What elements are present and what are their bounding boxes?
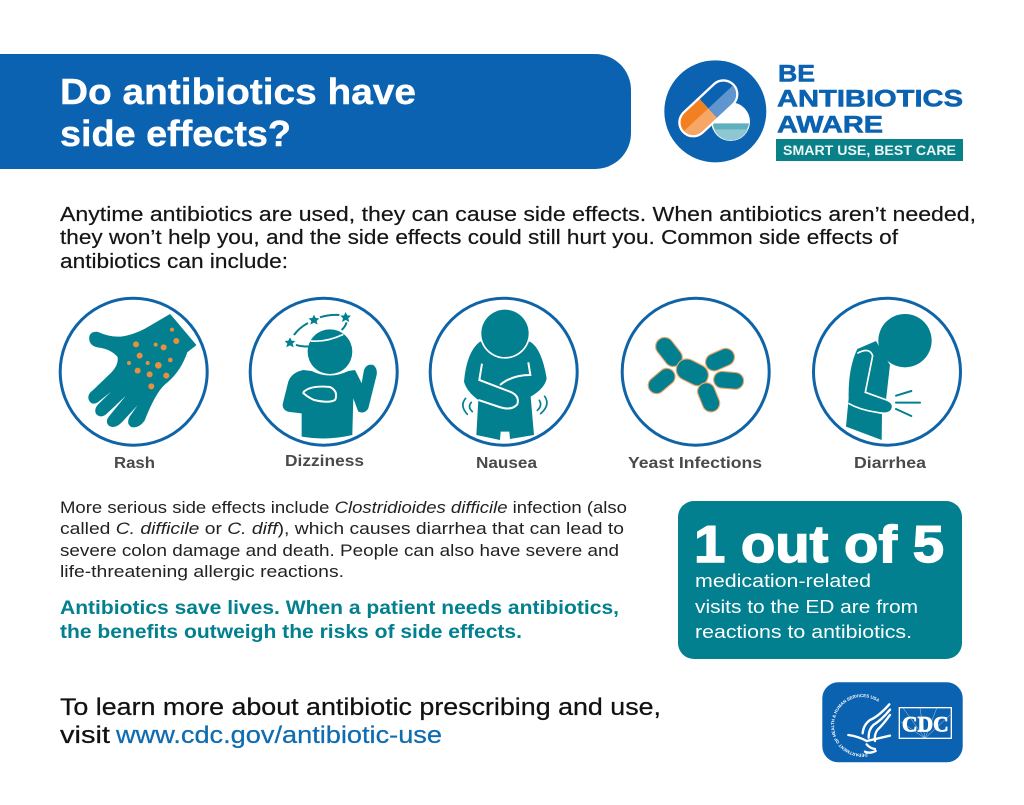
icon: diarrhea <box>814 298 960 445</box>
teal callout text: Antibiotics save lives. When a patient needs antibiotics, <box>60 597 619 619</box>
logo wordmark: AWARE <box>777 112 883 138</box>
label: yeast infections: Yeast Infections <box>628 455 762 472</box>
footer call to action: www.cdc.gov/antibiotic-use <box>115 722 442 749</box>
logo tagline: SMART USE, BEST CARE <box>783 143 956 158</box>
logo: HHS and CDC <box>822 682 963 762</box>
intro text: Anytime antibiotics are used, they can cause side effects. When antibiotics aren’t needed, <box>60 204 976 226</box>
statistic detail: visits to the ED are from <box>695 596 918 617</box>
icon: pill and bowl <box>664 60 766 162</box>
body text: serious side effects: severe colon damage and death. People can also have severe and <box>60 541 619 560</box>
person <box>464 342 547 440</box>
statistic callout <box>678 501 962 659</box>
person <box>846 341 893 440</box>
logo wordmark: ANTIBIOTICS <box>777 86 963 112</box>
statistic detail <box>695 570 918 642</box>
motion lines <box>896 391 920 416</box>
body text: serious side effects <box>60 498 627 581</box>
label: diarrhea: Diarrhea <box>854 455 926 472</box>
header banner <box>0 54 631 169</box>
big number: 1 out of 5 <box>694 516 944 574</box>
label: rash: Rash <box>114 455 155 472</box>
title: Do antibiotics have <box>60 71 416 112</box>
logo wordmark: BE <box>778 60 815 88</box>
label: nausea: Nausea <box>476 455 537 472</box>
intro text <box>60 204 976 273</box>
body text: serious side effects: called C. difficile or C. diff ), which causes diarrhea that can lead to <box>60 519 624 538</box>
halo with stars <box>294 315 347 346</box>
icon: yeast infections <box>622 298 769 445</box>
hand <box>89 315 195 427</box>
title <box>60 71 416 154</box>
icon: rash <box>60 298 207 445</box>
footer call to action: To learn more about antibiotic prescribing and use, <box>60 694 661 721</box>
footer call to action <box>60 694 661 749</box>
tremor marks <box>463 396 547 414</box>
logo tagline <box>776 139 963 161</box>
label: dizziness: Dizziness <box>285 453 364 470</box>
CDC mark: CDC <box>902 712 949 737</box>
teal callout text: the benefits outweigh the risks of side effects. <box>60 621 522 643</box>
teal callout text <box>60 597 619 643</box>
icon: dizziness <box>250 298 397 445</box>
intro text: they won’t help you, and the side effects could still hurt you. Common side effects of <box>60 227 898 249</box>
body text: serious side effects: life-threatening allergic reactions. <box>60 562 344 581</box>
statistic detail: medication-related <box>695 570 871 591</box>
footer call to action: visit <box>60 722 110 749</box>
rash spots <box>127 328 179 389</box>
body text: serious side effects: More serious side effects include Clostridioides difficile infection (also <box>60 498 627 517</box>
intro text: antibiotics can include: <box>60 251 288 273</box>
logo: Be Antibiotics Aware <box>664 60 963 162</box>
logo wordmark <box>777 60 963 138</box>
title: side effects? <box>60 113 291 154</box>
icon: nausea <box>430 298 577 445</box>
person <box>283 365 377 438</box>
HHS seal: DEPARTMENT OF HEALTH & HUMAN SERVICES USA <box>831 694 879 757</box>
statistic detail: reactions to antibiotics. <box>695 621 912 642</box>
